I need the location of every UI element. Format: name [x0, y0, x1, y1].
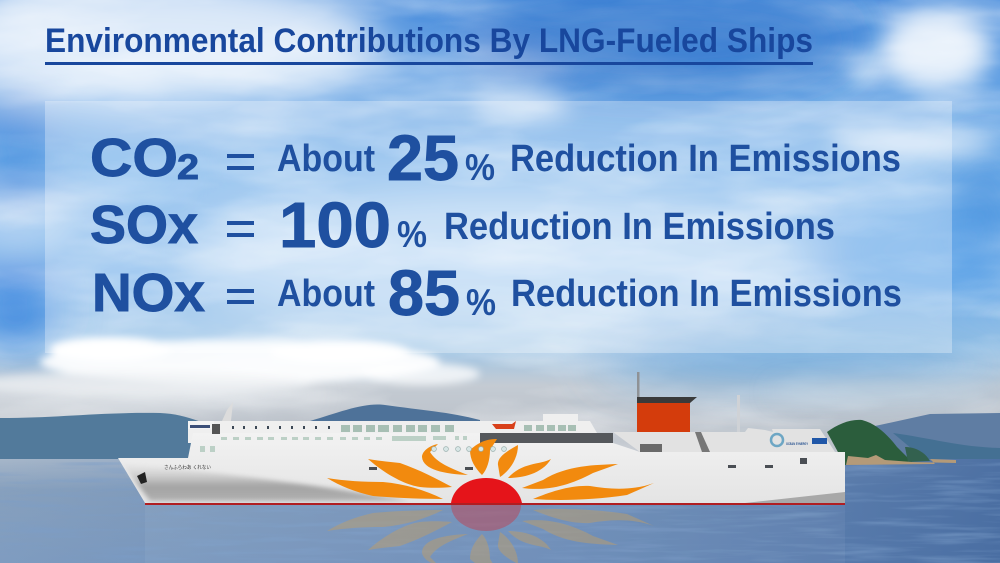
row: CO2: 2: [177, 148, 199, 187]
row: CO2: Reduction In Emissions: [510, 138, 901, 180]
row: CO2: About: [277, 138, 375, 180]
row: NOx: About: [277, 273, 375, 315]
background: sea: [0, 459, 1000, 563]
hull openings: [369, 458, 807, 470]
deck windows row: [232, 426, 330, 429]
background: low cloud bank: [0, 337, 480, 396]
row: CO2: 25: [387, 122, 459, 194]
bow mark: [137, 472, 147, 484]
background: distant mountains: [0, 404, 1000, 462]
stern vent: [695, 432, 710, 452]
island: [827, 420, 956, 465]
title: Environmental Contributions By LNG-Fueled Ships: [45, 22, 813, 60]
second-level windows: [200, 436, 467, 452]
row: NOx: 85: [388, 257, 460, 329]
row: SOx: [90, 189, 835, 261]
row: CO2: CO: [90, 128, 178, 188]
stern shading: [745, 492, 845, 503]
ship: [118, 372, 845, 505]
mast: [637, 372, 640, 398]
hull: [118, 433, 845, 503]
bow shading: [122, 464, 410, 501]
funnel: [637, 397, 697, 433]
row: NOx: %: [466, 282, 496, 323]
stern superstructure: [613, 428, 835, 452]
row: NOx: NOx: [92, 263, 205, 323]
row: SOx: 100: [279, 189, 391, 261]
upper deck: [188, 414, 597, 443]
stern logo: OCEAN SYNERGY: [786, 441, 808, 446]
sunburst livery: [327, 439, 654, 503]
row: SOx: Reduction In Emissions: [444, 206, 835, 248]
row: SOx: SOx: [90, 195, 198, 255]
lifeboat: [492, 421, 516, 429]
row: NOx: Reduction In Emissions: [511, 273, 902, 315]
row: CO2: %: [465, 147, 495, 188]
rays: [327, 439, 654, 500]
portholes: [432, 447, 506, 451]
exhaust pole: [737, 395, 740, 439]
stern opening: [640, 444, 662, 452]
stern logo: [771, 434, 827, 446]
translucent content panel: [45, 101, 952, 353]
reflection of ship in the water: [328, 505, 654, 563]
bridge: [188, 402, 233, 434]
dark deck band: [480, 433, 613, 443]
waterline: [145, 503, 845, 505]
sun: [451, 478, 522, 503]
row: SOx: %: [397, 214, 427, 255]
upper lounge windows: [341, 425, 576, 432]
ship name: さんふらわあ くれない: [164, 464, 211, 471]
row: CO2: [90, 122, 901, 194]
row: NOx: [92, 257, 902, 329]
